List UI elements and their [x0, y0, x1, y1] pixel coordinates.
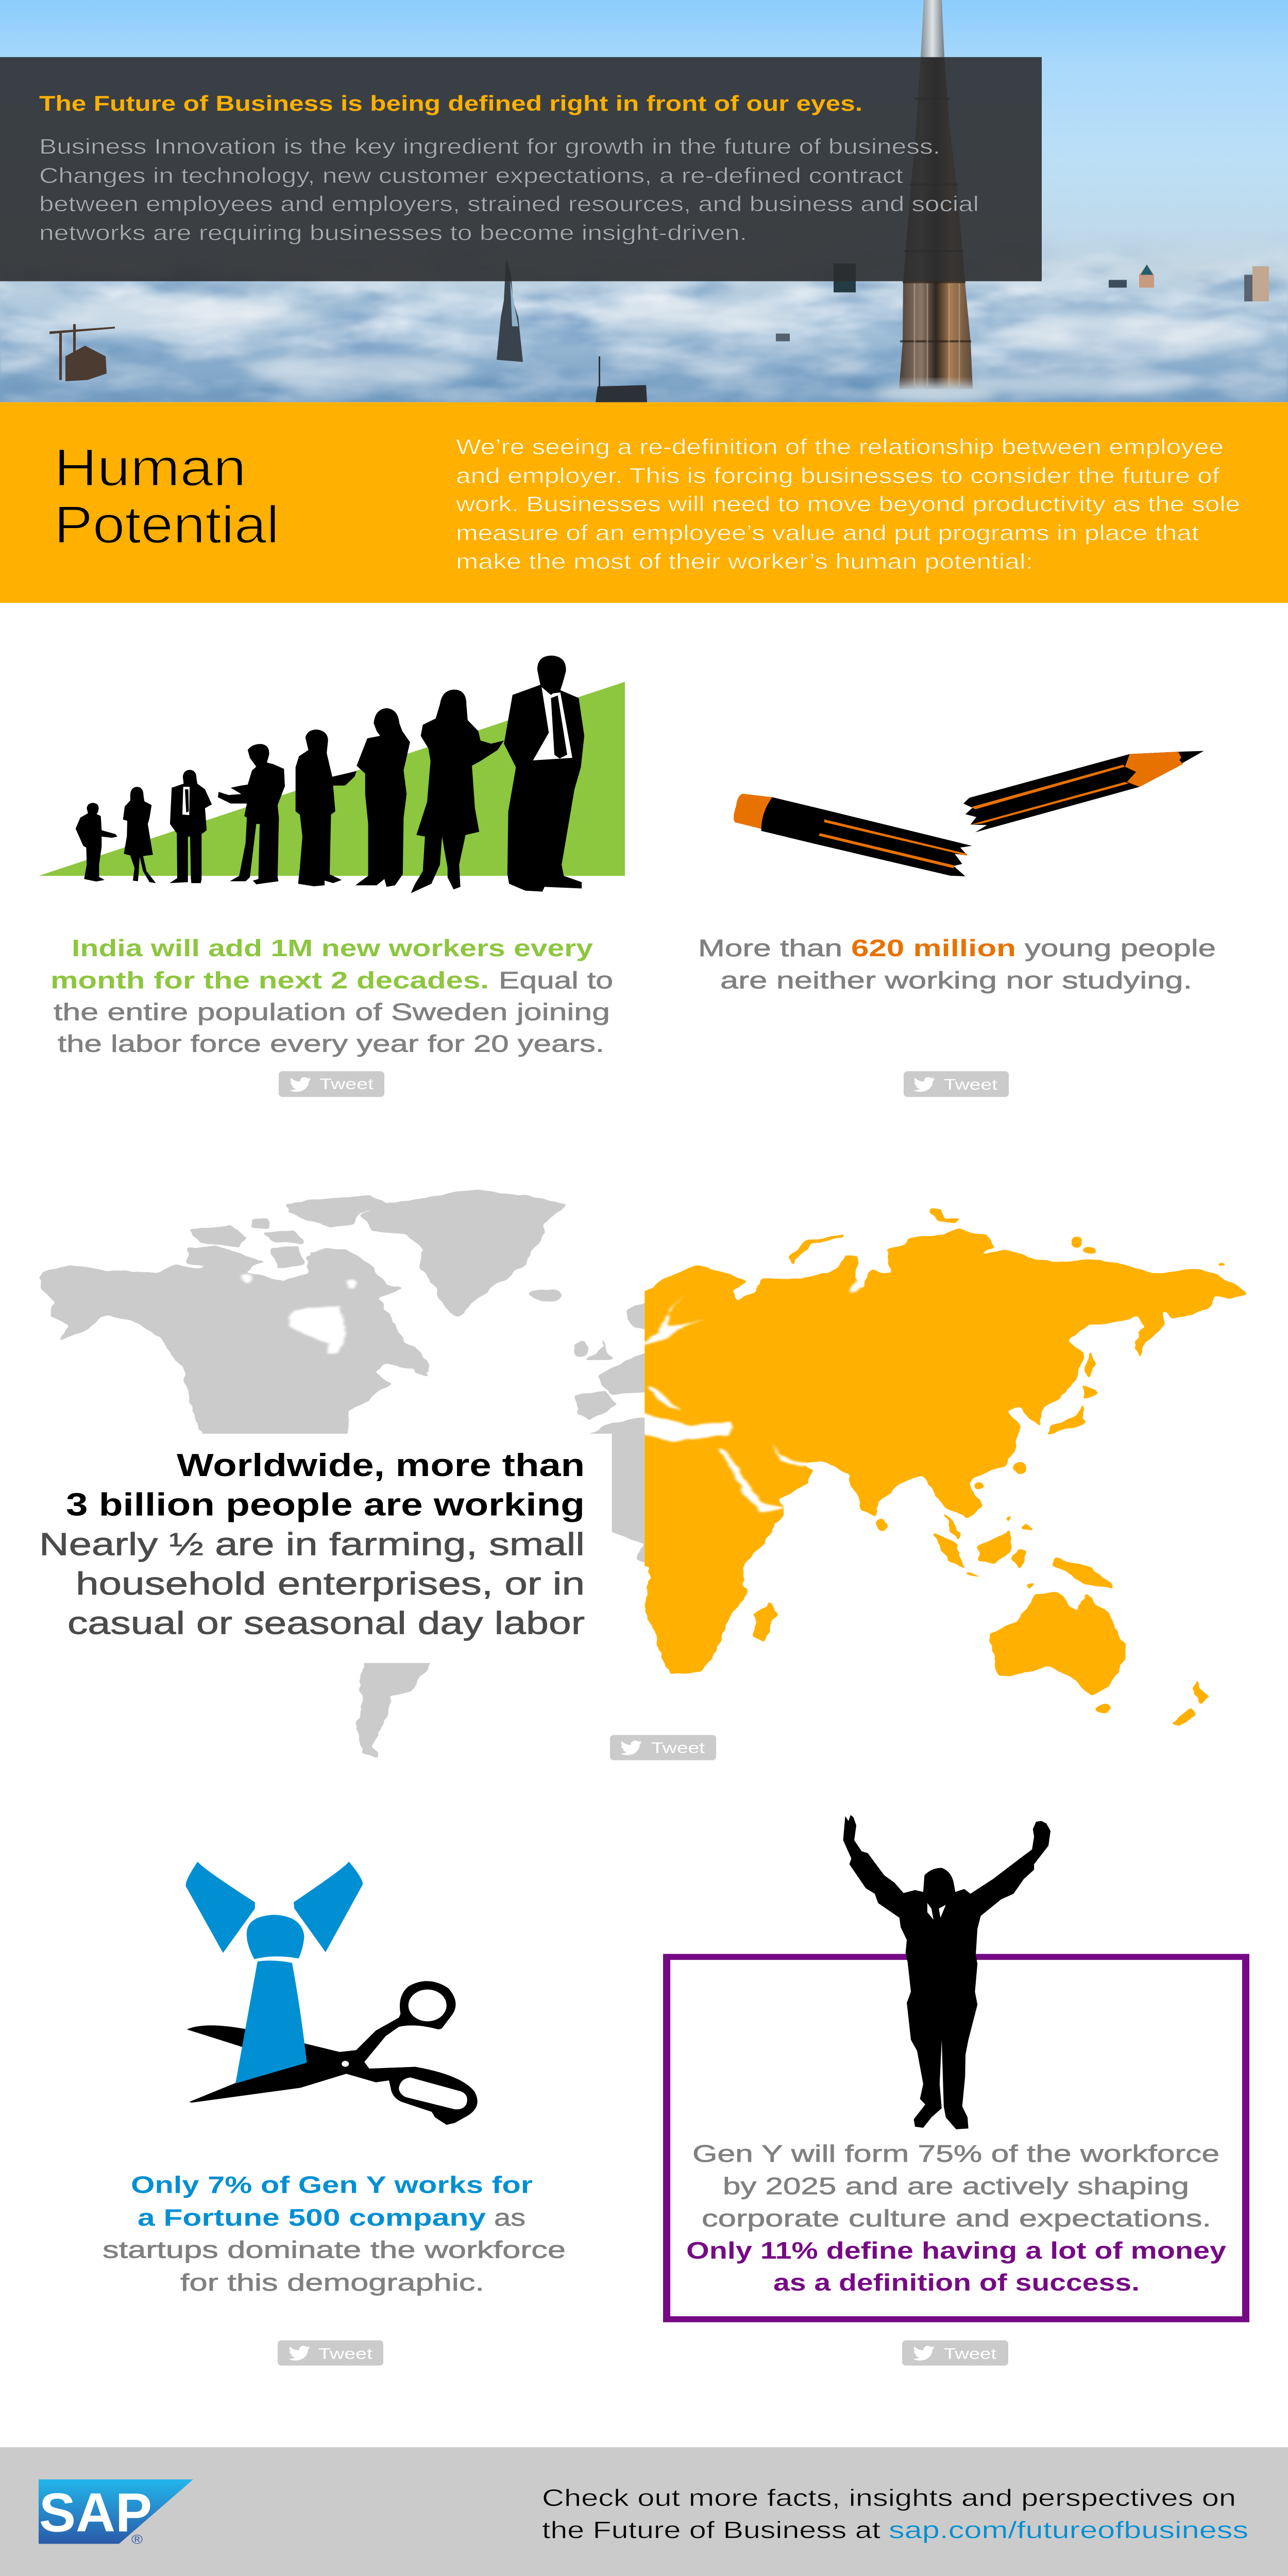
- grey landmasses: [40, 1189, 657, 1759]
- stat: worldwide workers: [39, 1447, 585, 1641]
- crane and building: [49, 324, 115, 381]
- stat: 620 million young people: 620 million: [851, 934, 1016, 961]
- stat: worldwide workers: Nearly ½ are in farming, small: [39, 1526, 585, 1562]
- chart: workers silhouettes on rising green triangle: [39, 655, 625, 893]
- white backing box behind map text: [0, 1434, 612, 1663]
- section intro paragraph: work. Businesses will need to move beyond productivity as the sole: [455, 492, 1240, 516]
- tweet button: Tweet: [944, 2345, 996, 2363]
- stat: India workers: the labor force every year for 20 years.: [58, 1030, 604, 1057]
- section title: [54, 438, 279, 554]
- small spire tower: [497, 261, 523, 362]
- icon: broken pencil: [734, 751, 1204, 876]
- intro paragraph: between employees and employers, strained resources, and business and social: [39, 192, 979, 216]
- footer call to action: the Future of Business at: [542, 2516, 880, 2544]
- stat: Gen Y 75 percent: [686, 2140, 1226, 2296]
- tweet button: [279, 1071, 384, 1097]
- stat: 620 million young people: are neither working nor studying.: [720, 967, 1192, 993]
- stat: Gen Y 75 percent: by 2025 and are actively shaping: [723, 2173, 1189, 2199]
- stat: Gen Y Fortune 500: for this demographic.: [180, 2268, 484, 2296]
- distant towers: [776, 264, 1269, 341]
- section intro paragraph: and employer. This is forcing businesses to consider the future of: [456, 463, 1219, 488]
- orange landmasses: [632, 1208, 1248, 1727]
- purple frame panel: [667, 1957, 1246, 2319]
- green growth triangle: [39, 682, 625, 876]
- tweet button: [278, 2340, 383, 2366]
- intro paragraph: [39, 134, 979, 245]
- intro paragraph: networks are requiring businesses to become insight-driven.: [39, 221, 747, 245]
- tie and collar: [186, 1861, 363, 2083]
- tweet button: [904, 1071, 1009, 1097]
- stat: Gen Y 75 percent: Gen Y will form 75% of the workforce: [692, 2140, 1219, 2167]
- section intro paragraph: measure of an employee’s value and put programs in place that: [456, 520, 1199, 545]
- yellow band: Human Potential: [0, 402, 1288, 603]
- SAP logo: SAP: [39, 2481, 152, 2543]
- foreground building: [596, 357, 647, 402]
- main tower: [874, 0, 997, 402]
- dark intro panel: [0, 57, 1042, 281]
- section title: Potential: [54, 495, 279, 554]
- section intro paragraph: make the most of their worker’s human potential:: [456, 549, 1033, 573]
- section intro paragraph: We’re seeing a re-definition of the relationship between employee: [456, 435, 1224, 459]
- tweet button: Tweet: [318, 2345, 372, 2363]
- tweet button: Tweet: [651, 1739, 705, 1757]
- intro heading: The Future of Business is being defined right in front of our eyes.: [39, 91, 862, 115]
- tweet button: Tweet: [944, 1076, 997, 1093]
- footer band: [0, 2447, 1288, 2576]
- tweet button: [610, 1735, 716, 1760]
- scissors: [187, 1981, 478, 2125]
- stat: India workers: month for the next 2 decades.: [50, 967, 489, 993]
- distant dark block: [834, 264, 856, 293]
- stat: India workers: [50, 934, 613, 1057]
- stat: Gen Y Fortune 500: Only 7% of Gen Y works for: [131, 2171, 533, 2198]
- intro paragraph: Changes in technology, new customer expectations, a re-defined contract: [39, 163, 903, 188]
- stat: Gen Y Fortune 500: as: [494, 2204, 526, 2231]
- stat: Gen Y Fortune 500: startups dominate the workforce: [103, 2236, 566, 2263]
- silhouette: man with raised arms: [843, 1815, 1050, 2129]
- world map: grey west, orange east: [0, 1189, 1248, 1759]
- stat: worldwide workers: Worldwide, more than: [177, 1447, 585, 1483]
- section intro paragraph: [455, 435, 1240, 573]
- stat: Gen Y 75 percent: as a definition of success.: [773, 2268, 1140, 2296]
- icon: blue tie cut by scissors: [186, 1861, 478, 2125]
- section title: Human: [54, 438, 246, 497]
- footer call to action: [542, 2484, 1248, 2544]
- footer call to action: Check out more facts, insights and perspectives on: [542, 2484, 1236, 2511]
- stat: 620 million young people: More than: [698, 934, 842, 961]
- intro paragraph: Business Innovation is the key ingredient for growth in the future of business.: [39, 134, 940, 158]
- stat: Gen Y 75 percent: corporate culture and expectations.: [702, 2205, 1211, 2232]
- stat: worldwide workers: casual or seasonal day labor: [67, 1605, 585, 1641]
- tweet button: Tweet: [319, 1076, 374, 1093]
- SAP logo: ®: [131, 2532, 143, 2547]
- stat: 620 million young people: [698, 934, 1216, 993]
- footer call to action: sap.com/futureofbusiness: [889, 2516, 1248, 2544]
- stat: India workers: India will add 1M new workers every: [72, 934, 593, 961]
- silhouettes of eight workers: [76, 655, 584, 893]
- stat: 620 million young people: young people: [1025, 934, 1216, 961]
- cloud layer: [0, 232, 1288, 402]
- stat: Gen Y Fortune 500: [103, 2171, 566, 2296]
- stat: India workers: Equal to: [499, 967, 613, 993]
- stat: Gen Y 75 percent: Only 11% define having a lot of money: [686, 2237, 1226, 2264]
- stat: Gen Y Fortune 500: a Fortune 500 company: [138, 2204, 486, 2231]
- stat: worldwide workers: 3 billion people are working: [66, 1487, 585, 1522]
- tweet button: [902, 2340, 1008, 2366]
- stat: India workers: the entire population of Sweden joining: [54, 998, 610, 1025]
- stat: worldwide workers: household enterprises, or in: [76, 1566, 585, 1602]
- hero photo: towers above clouds: [0, 0, 1288, 402]
